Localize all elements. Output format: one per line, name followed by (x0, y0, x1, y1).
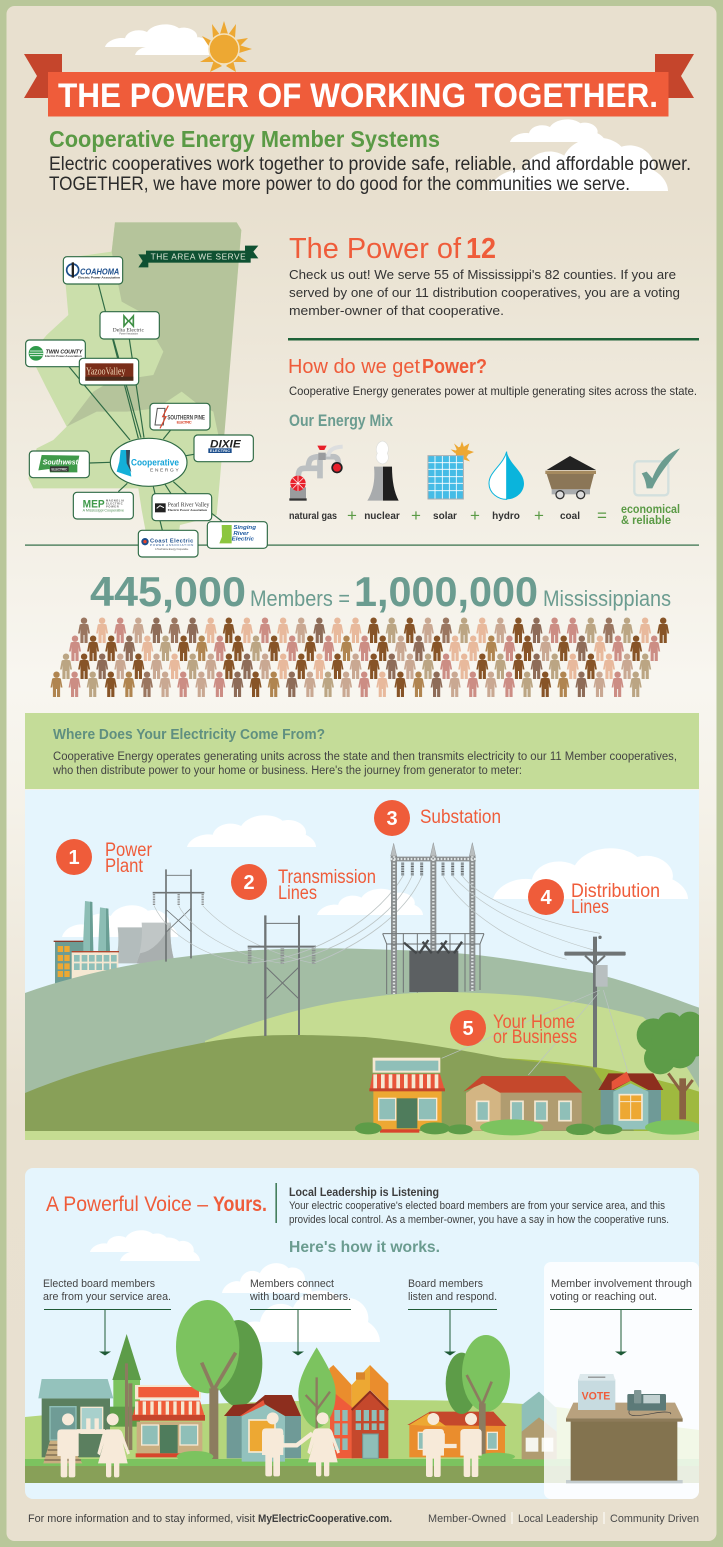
logo: Coahoma: COAHOMA (80, 266, 119, 276)
logo: Southern Pine (150, 403, 210, 430)
caption 2 with arrow (249, 1278, 351, 1356)
back hill (25, 1400, 699, 1460)
logo: Twin County: Electric Power Association (45, 354, 82, 358)
energy mix operators: + (411, 506, 421, 525)
energy mix labels: hydro (492, 511, 520, 522)
title ribbon: THE POWER OF WORKING TOGETHER. (58, 77, 658, 115)
transmission tower 2 (248, 915, 316, 1036)
step 1 label: 1 (68, 847, 80, 869)
left scene (38, 1300, 336, 1463)
cloud: top left (105, 24, 215, 55)
icon: coal (545, 456, 596, 499)
step 3 label (374, 800, 501, 836)
text: local leadership: Your electric cooperative's elected board members are from your service area, and this (289, 1200, 665, 1212)
icon: natural gas (289, 446, 343, 501)
logo: Cooperative Energy hub: ENERGY (150, 467, 179, 473)
caption 3 with arrow: Board members (408, 1278, 483, 1290)
ground strip (25, 1131, 700, 1140)
step 5 label (450, 1010, 577, 1048)
back hill (25, 948, 699, 1093)
text: generating sites: Cooperative Energy generates power at multiple generating sites across the state. (289, 384, 697, 398)
footer: more information (28, 1513, 392, 1525)
ranch home (463, 1076, 583, 1131)
logo: Twin County (26, 340, 85, 367)
logo: Coahoma (63, 257, 123, 284)
intro text: TOGETHER, we have more power to do good for the communities we serve. (49, 174, 630, 195)
step 1 label (56, 839, 153, 877)
members statistic: 445,000 (90, 568, 246, 615)
logo: Delta Electric: Delta Electric (113, 327, 144, 333)
logo: Magnolia Electric Power: A Mississippi Cooperative (83, 509, 124, 513)
energy mix icons (289, 441, 680, 501)
heading: The Power of 12: 12 (466, 233, 496, 265)
logo: Delta Electric (100, 312, 159, 339)
transmission tower 1 (153, 869, 314, 963)
panel heading: Where Does Your Electricity Come From? (53, 727, 325, 743)
caption 3 with arrow (408, 1278, 497, 1356)
white panel for involvement (544, 1262, 699, 1499)
energy mix operators: + (347, 506, 357, 525)
icon: solar (428, 441, 474, 499)
divider under map (25, 544, 699, 546)
logo: Pearl River Valley (152, 494, 212, 521)
logo: Coast Electric (138, 530, 198, 557)
heading: How do we get Power? (288, 356, 487, 378)
caption 4 with arrow: Member involvement through (551, 1278, 692, 1290)
voice clouds (90, 1230, 380, 1342)
logo: Southern Pine: SOUTHERN PINE (167, 415, 205, 421)
step 1 label: Power (105, 840, 153, 861)
people: members connect (262, 1412, 340, 1476)
tree (446, 1335, 515, 1461)
members statistic: 1,000,000 (354, 568, 538, 615)
text: counties served: served by one of our 11 distribution cooperatives, you are a voting (289, 285, 680, 300)
footer: more information: MyElectricCooperative.com. (258, 1513, 392, 1525)
step 4 label: Lines (571, 897, 609, 918)
step 3 label: 3 (386, 808, 398, 830)
orange apartment (329, 1365, 388, 1458)
logo: Coast Electric: POWER ASSOCIATION (150, 543, 193, 547)
logo: Dixie Electric: DIXIE (210, 439, 241, 451)
panel body text: who then distribute power to your home or business. Here's the journey from generator to meter: (52, 765, 522, 777)
text: counties served: Check us out! We serve 55 of Mississippi's 82 counties. If you are (289, 267, 676, 282)
title ribbon (24, 54, 694, 116)
right scene (407, 1335, 557, 1461)
economical and reliable label: & reliable (621, 513, 671, 527)
banner: the area we serve: THE AREA WE SERVE (151, 252, 246, 262)
logo: Cooperative Energy hub (110, 438, 187, 486)
pine tree (110, 1334, 141, 1450)
logo: Yazoo Valley (79, 358, 139, 385)
logo: Singing River Electric: Singing (233, 525, 257, 531)
buildings: shop and homes (355, 1058, 702, 1135)
connector lines (69, 284, 222, 530)
cottage (598, 1072, 663, 1129)
caption 2 with arrow: with board members. (249, 1291, 351, 1303)
heading: The Power of 12: The Power of (289, 233, 462, 265)
shop (369, 1058, 445, 1133)
logo: Singing River Electric: Electric (232, 537, 255, 543)
energy mix labels: nuclear (364, 511, 400, 522)
substation (383, 843, 484, 994)
logo: Magnolia Electric Power: POWER (106, 505, 119, 509)
people: board members listen (423, 1413, 482, 1477)
footer: more information: For more information and to stay informed, visit (28, 1513, 255, 1525)
logo: Singing River Electric (207, 522, 267, 548)
energy mix operators: + (534, 506, 544, 525)
logo: Pearl River Valley: Electric Power Association (168, 508, 207, 512)
footer: tagline: Local Leadership (518, 1513, 598, 1525)
caption 1 with arrow: are from your service area. (43, 1291, 171, 1303)
icon: sun (200, 21, 252, 72)
economical and reliable label (621, 502, 680, 527)
footer: tagline: Community Driven (610, 1513, 699, 1525)
telephone (627, 1390, 671, 1416)
logo: Pearl River Valley: Pearl River Valley (168, 503, 209, 509)
step 2 label: Transmission (278, 867, 376, 888)
step 4 label (528, 879, 660, 918)
logo: Magnolia Electric Power: MEP (83, 499, 105, 511)
ballot box: VOTE (582, 1390, 610, 1402)
step 2 label: Lines (278, 883, 317, 904)
background building (522, 1392, 557, 1459)
members statistic: Mississippians (543, 586, 671, 611)
logo: Southern Pine: ELECTRIC (177, 420, 192, 424)
vertical rule (276, 1183, 277, 1223)
logo: Dixie Electric: ELECTRIC (210, 449, 230, 453)
text: local leadership: provides local control. As a member-owner, you have a say in how the cooperative runs. (289, 1214, 669, 1226)
text: local leadership (289, 1187, 669, 1226)
sky clouds (62, 815, 688, 937)
ground (25, 1459, 699, 1483)
logo: Magnolia Electric Power: MAGNOLIA (106, 499, 124, 503)
tree (636, 1012, 699, 1120)
subheading: Cooperative Energy Member Systems (49, 126, 440, 152)
energy mix operators: + (470, 506, 480, 525)
intro text: Electric cooperatives work together to provide safe, reliable, and affordable power. (49, 154, 691, 175)
heading: How do we get Power?: Power? (422, 356, 487, 378)
panel: a powerful voice (25, 1168, 699, 1499)
footer: tagline (428, 1512, 699, 1525)
footer: tagline: Member-Owned (428, 1513, 506, 1525)
icon: hydro (489, 452, 524, 499)
panel body text (52, 751, 677, 777)
step 3 label: Substation (420, 807, 501, 828)
leaf tree (298, 1347, 336, 1430)
members statistic (90, 568, 671, 615)
logo: Southwest Electric: ELECTRIC (51, 467, 68, 471)
logo: Magnolia Electric Power (73, 492, 133, 519)
hill: right (504, 1058, 699, 1131)
logo: Cooperative Energy hub: Cooperative (131, 458, 179, 468)
logo: Delta Electric: Power Association (119, 333, 139, 336)
caption 1 with arrow: Elected board members (43, 1278, 155, 1290)
distribution pole (442, 876, 628, 1075)
members statistic: Members = (250, 586, 350, 611)
large tree (176, 1300, 262, 1459)
caption 4 with arrow (550, 1278, 692, 1356)
hill: front (25, 1035, 640, 1140)
storefront (132, 1385, 205, 1457)
orange house (407, 1412, 507, 1457)
panel: generator to meter scene (25, 790, 707, 1140)
text: local leadership: Local Leadership is Listening (289, 1187, 439, 1199)
people row chart (50, 618, 669, 697)
logo: Coahoma: Electric Power Association (78, 275, 120, 279)
intro text (49, 154, 691, 195)
energy mix labels: natural gas (289, 511, 337, 522)
caption 1 with arrow (43, 1278, 171, 1356)
economical and reliable label: economical (621, 502, 680, 516)
green rule (288, 338, 699, 340)
step 5 label: Your Home (493, 1012, 575, 1033)
state shape (28, 222, 241, 537)
heading: Our Energy Mix: Our Energy Mix (289, 411, 393, 430)
logo: Dixie Electric (194, 435, 253, 462)
energy mix labels: coal (560, 511, 580, 522)
transmission wires (250, 876, 422, 963)
people: elected board members (57, 1413, 130, 1477)
step 1 label: Plant (105, 856, 144, 877)
caption 3 with arrow: listen and respond. (408, 1291, 497, 1303)
heading: a powerful voice: A Powerful Voice – (46, 1193, 208, 1216)
map: the area we serve (26, 222, 267, 557)
text: counties served (289, 267, 680, 318)
caption 2 with arrow: Members connect (250, 1278, 334, 1290)
panel body text: Cooperative Energy operates generating units across the state and then transmits electricity to our 11 Member cooperatives, (53, 751, 677, 763)
bush (176, 1451, 214, 1459)
blue house (224, 1395, 301, 1462)
logo: Coast Electric: Coast Electric (150, 538, 193, 544)
icon: nuclear (367, 441, 399, 501)
energy mix operators (347, 506, 607, 525)
text: counties served: member-owner of that cooperative. (289, 303, 504, 318)
step 5 label: 5 (462, 1018, 474, 1040)
step 2 label (231, 864, 375, 900)
heading: here's how it works: Here's how it works. (289, 1239, 440, 1256)
step 5 label: or Business (493, 1027, 577, 1048)
logo: Southwest Electric: Southwest (43, 457, 78, 466)
step 2 label: 2 (243, 872, 255, 894)
heading: How do we get Power?: How do we get (288, 356, 420, 378)
voting desk (566, 1374, 683, 1483)
panel: where does your electricity come from (25, 713, 699, 789)
icon: checkmark (634, 448, 680, 495)
logo: Twin County: TWIN COUNTY (46, 349, 83, 355)
logo: Coast Electric: A Touchstone Energy Cooperative (155, 548, 189, 551)
logo: Magnolia Electric Power: ELECTRIC (106, 502, 123, 506)
green house (38, 1379, 113, 1463)
hill: middle (205, 992, 699, 1092)
energy mix labels: solar (433, 511, 457, 522)
energy mix labels (289, 511, 580, 522)
logo: Yazoo Valley: YazooValley (86, 366, 125, 377)
banner: the area we serve (138, 246, 258, 267)
power plant (54, 901, 175, 987)
heading: a powerful voice: Yours. (213, 1193, 267, 1216)
step 4 label: 4 (540, 887, 552, 909)
cloud: top right (489, 119, 668, 191)
logo: Singing River Electric: River (233, 531, 250, 537)
step 4 label: Distribution (571, 881, 660, 902)
energy mix operators: = (597, 506, 607, 525)
caption 4 with arrow: voting or reaching out. (550, 1291, 657, 1303)
logo: Southwest Electric (29, 451, 89, 478)
bushes (355, 1119, 702, 1135)
